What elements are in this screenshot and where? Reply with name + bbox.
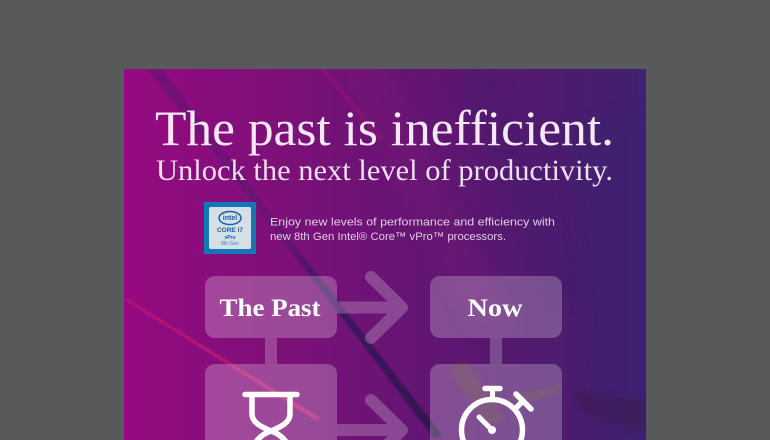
connector: now [490,338,502,364]
connector: past [265,338,277,364]
box: Now heading: Now [468,295,522,322]
intro text: new 8th Gen Intel® Core™ vPro™ processors. [270,231,506,243]
title: The past is inefficient. [155,100,614,156]
icon: Intel Core i7 vPro badge: intel [223,215,237,222]
icon: hourglass [245,394,297,440]
box: hourglass [205,364,337,440]
box: stopwatch [430,364,562,440]
box: The Past heading [205,276,337,338]
box: Now heading [430,276,562,338]
icon: stopwatch [462,388,531,440]
intro text: Enjoy new levels of performance and efficiency with [270,216,555,228]
arrow: top [337,277,402,338]
icon: Intel Core i7 vPro badge: CORE i7 [217,227,243,234]
icon: Intel Core i7 vPro badge: vPro [224,235,236,241]
icon: Intel Core i7 vPro badge: 8th Gen [221,241,239,247]
box: The Past heading: The Past [220,295,321,322]
arrow: bottom [337,400,402,440]
infographic canvas [124,69,646,440]
panel: purple poster background [124,69,646,440]
panel: Now column [430,276,562,440]
panel: The Past column [205,276,337,440]
intro text [270,216,555,243]
icon: Intel Core i7 vPro badge [204,202,256,254]
subtitle: Unlock the next level of productivity. [156,154,613,187]
